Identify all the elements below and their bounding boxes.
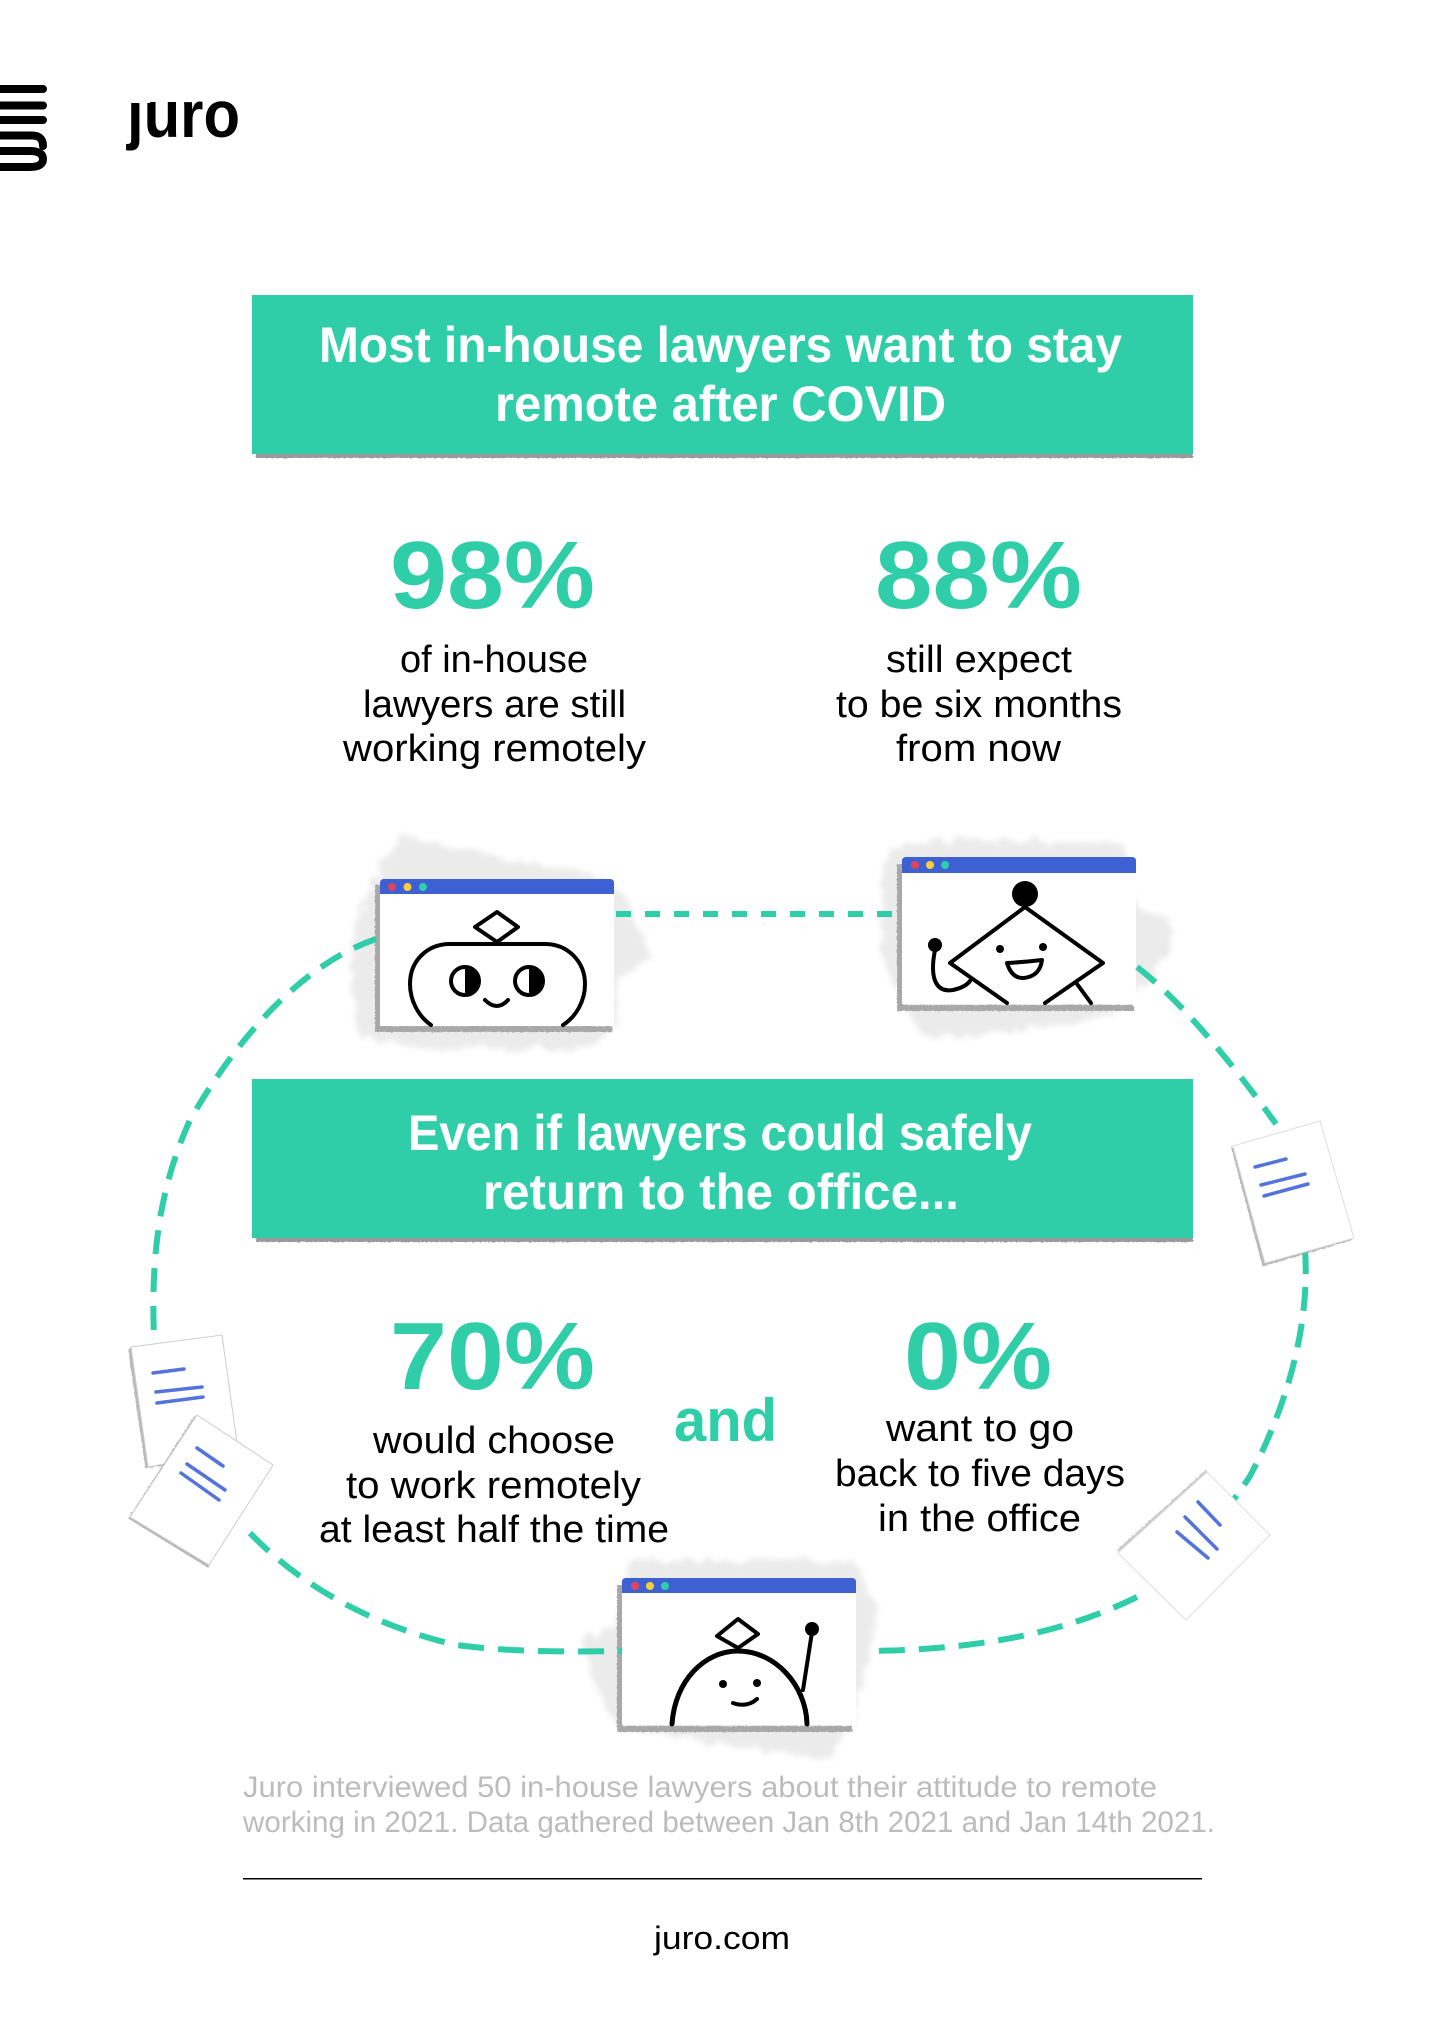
stat: 88 percent: to be six months: [836, 684, 1122, 726]
panel: first headline banner: remote after COVID: [495, 376, 946, 432]
stat: 98 percent: [342, 522, 646, 770]
illustration: round character window: [580, 1560, 877, 1760]
panel: second headline banner: Even if lawyers could safely: [408, 1105, 1032, 1161]
stat: 0 percent: 0%: [904, 1303, 1052, 1410]
footnote: survey method: [242, 1771, 1215, 1839]
stat: 70 percent: at least half the time: [319, 1509, 669, 1551]
illustration: robot window: [350, 837, 653, 1050]
logo wordmark: juro: juro: [125, 77, 240, 151]
footnote: survey method: working in 2021. Data gathered between Jan 8th 2021 and Jan 14th 2021.: [242, 1806, 1215, 1839]
icon: document upper right: [1233, 1121, 1354, 1264]
panel: first headline banner: [252, 295, 1193, 458]
panel: second headline banner: [252, 1079, 1193, 1242]
icon: juro logo stripes: [0, 89, 43, 167]
stat: 70 percent: would choose: [372, 1420, 615, 1462]
stat: 98 percent: lawyers are still: [363, 684, 626, 726]
stat: 88 percent: 88%: [875, 522, 1082, 629]
panel: first headline banner: Most in-house lawyers want to stay: [319, 317, 1122, 373]
stat: 70 percent: 70%: [390, 1303, 595, 1410]
stat: 98 percent: of in-house: [400, 639, 588, 681]
connector word: and: and: [674, 1387, 777, 1454]
stat: 98 percent: working remotely: [342, 728, 646, 770]
dashed loop connecting the windows and documents: [153, 914, 1306, 1651]
footer link text: juro.com: [653, 1920, 790, 1956]
footnote: survey method: Juro interviewed 50 in-house lawyers about their attitude to remote: [243, 1771, 1157, 1804]
stat: 98 percent: 98%: [390, 522, 595, 629]
icon: document lower right: [1118, 1471, 1270, 1620]
stat: 88 percent: still expect: [886, 639, 1072, 681]
stat: 0 percent: want to go: [885, 1408, 1074, 1450]
illustration: diamond character window: [880, 840, 1172, 1037]
stat: 88 percent: from now: [896, 728, 1062, 770]
stat: 88 percent: [836, 522, 1122, 770]
stat: 70 percent: [319, 1303, 669, 1551]
panel: second headline banner: return to the office...: [483, 1164, 959, 1220]
stat: 0 percent: [835, 1303, 1125, 1540]
stat: 0 percent: in the office: [878, 1498, 1081, 1540]
stat: 0 percent: back to five days: [835, 1453, 1125, 1495]
icon: document lower left, front: [130, 1415, 273, 1566]
stat: 70 percent: to work remotely: [346, 1465, 641, 1507]
icon: document lower left, back: [130, 1335, 238, 1467]
